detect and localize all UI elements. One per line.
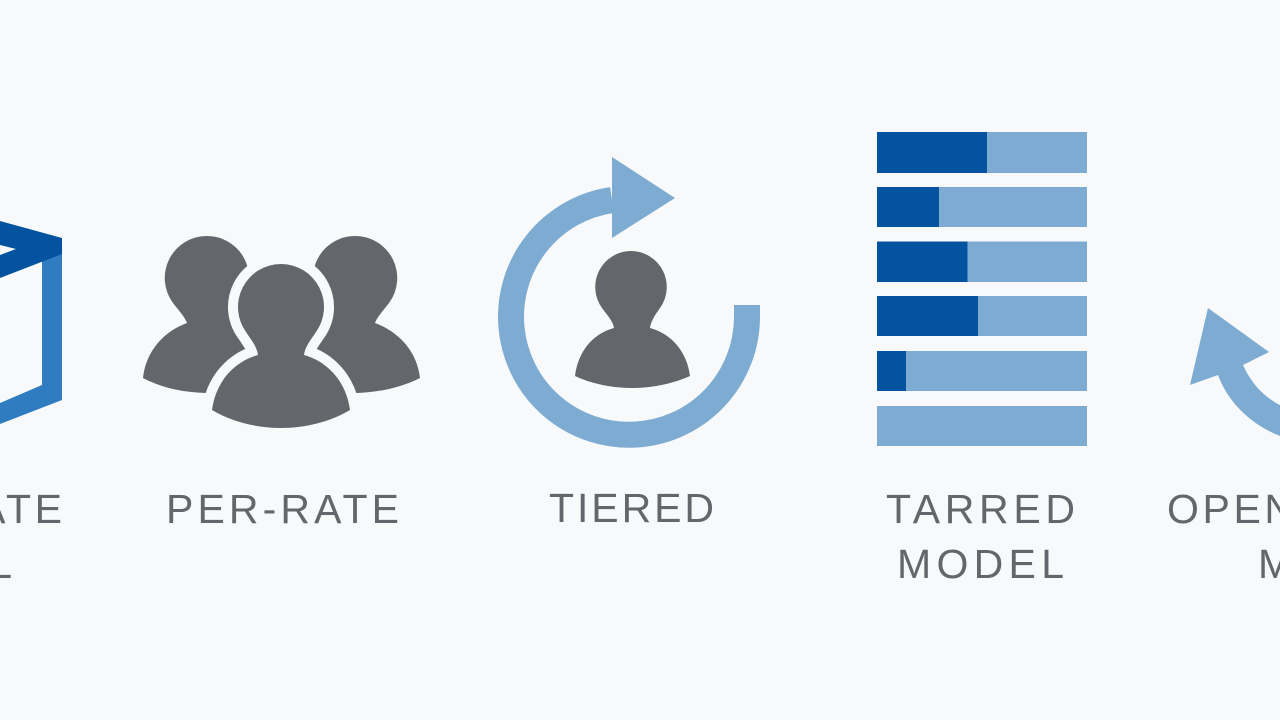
panel: flat-rate model (0, 221, 66, 587)
panel: open-rate model (1167, 308, 1280, 587)
icon: three people (143, 236, 420, 428)
icon: box (0, 221, 62, 424)
panel: tiered (511, 157, 747, 531)
label: tarred: TARRED (886, 486, 1075, 532)
panel: per-rate (143, 236, 420, 532)
icon: circular arrow (1190, 308, 1280, 436)
icon: person (575, 251, 690, 388)
icon: circular arrow (511, 157, 747, 435)
label: per-rate: PER-RATE (166, 486, 399, 532)
chart: stacked bars (877, 132, 1087, 446)
label: tiered: TIERED (549, 485, 714, 531)
label: model: MODEL (897, 541, 1064, 587)
panel: tarred model (877, 132, 1087, 587)
